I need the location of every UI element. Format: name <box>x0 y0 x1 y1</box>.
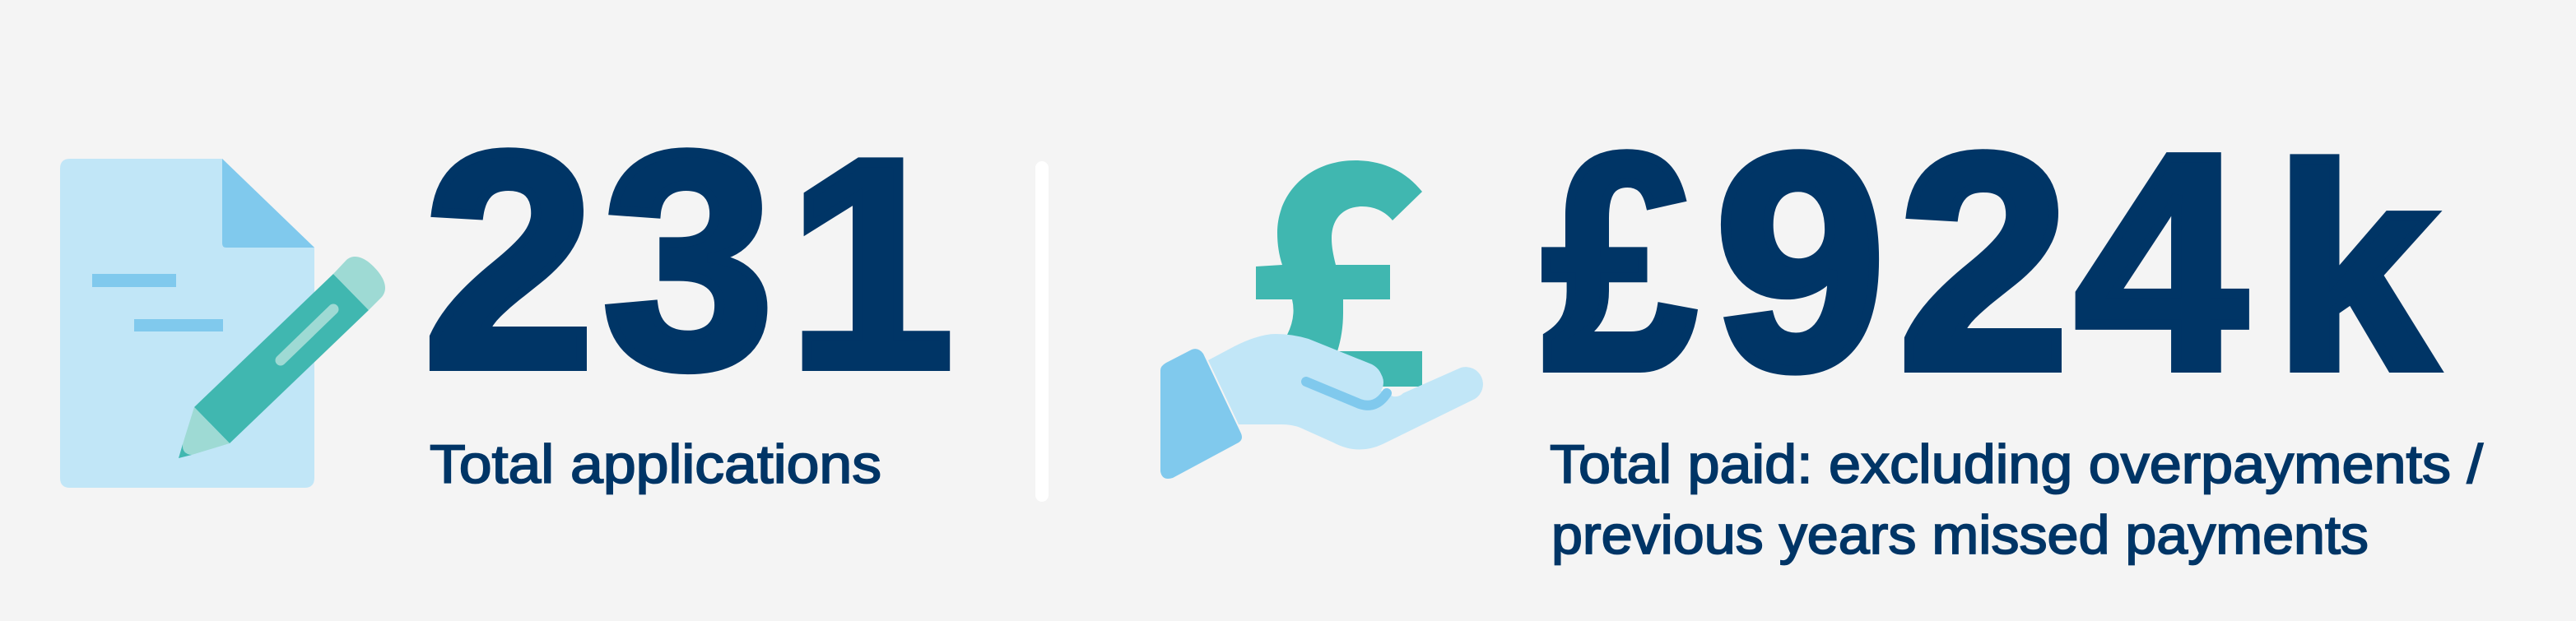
panel: total paid <box>1160 90 2484 565</box>
figure: £924k: £ <box>1543 90 1695 433</box>
thumb tip <box>1352 367 1383 398</box>
panel: total applications <box>60 89 953 494</box>
divider <box>1035 161 1049 502</box>
icon: document with pencil <box>60 159 385 488</box>
figure: 231: 1 <box>788 99 953 429</box>
document page <box>60 159 314 488</box>
figure: £924k <box>1543 90 2437 433</box>
pencil wood tip <box>183 407 230 455</box>
pencil eraser <box>333 257 385 310</box>
palm crease <box>1306 382 1387 406</box>
icon: hand holding pound coin <box>1160 160 1483 479</box>
label: total paid, line 2: previous years missed payments <box>1551 504 2369 565</box>
figure: £924k: k <box>2275 108 2437 429</box>
pencil highlight <box>281 309 333 360</box>
document folded corner <box>222 159 314 248</box>
label: total applications: Total applications <box>430 433 881 494</box>
figure: £924k: 924 <box>1715 90 2248 433</box>
label: total paid, line 1: Total paid: excluding overpayments / <box>1550 433 2484 494</box>
pencil body <box>194 274 369 443</box>
figure: 231: 23 <box>424 89 774 431</box>
sleeve cuff <box>1160 349 1242 479</box>
document text lines <box>92 274 223 331</box>
hand <box>1208 334 1483 450</box>
pound sign <box>1256 160 1422 387</box>
pencil lead <box>179 444 192 458</box>
